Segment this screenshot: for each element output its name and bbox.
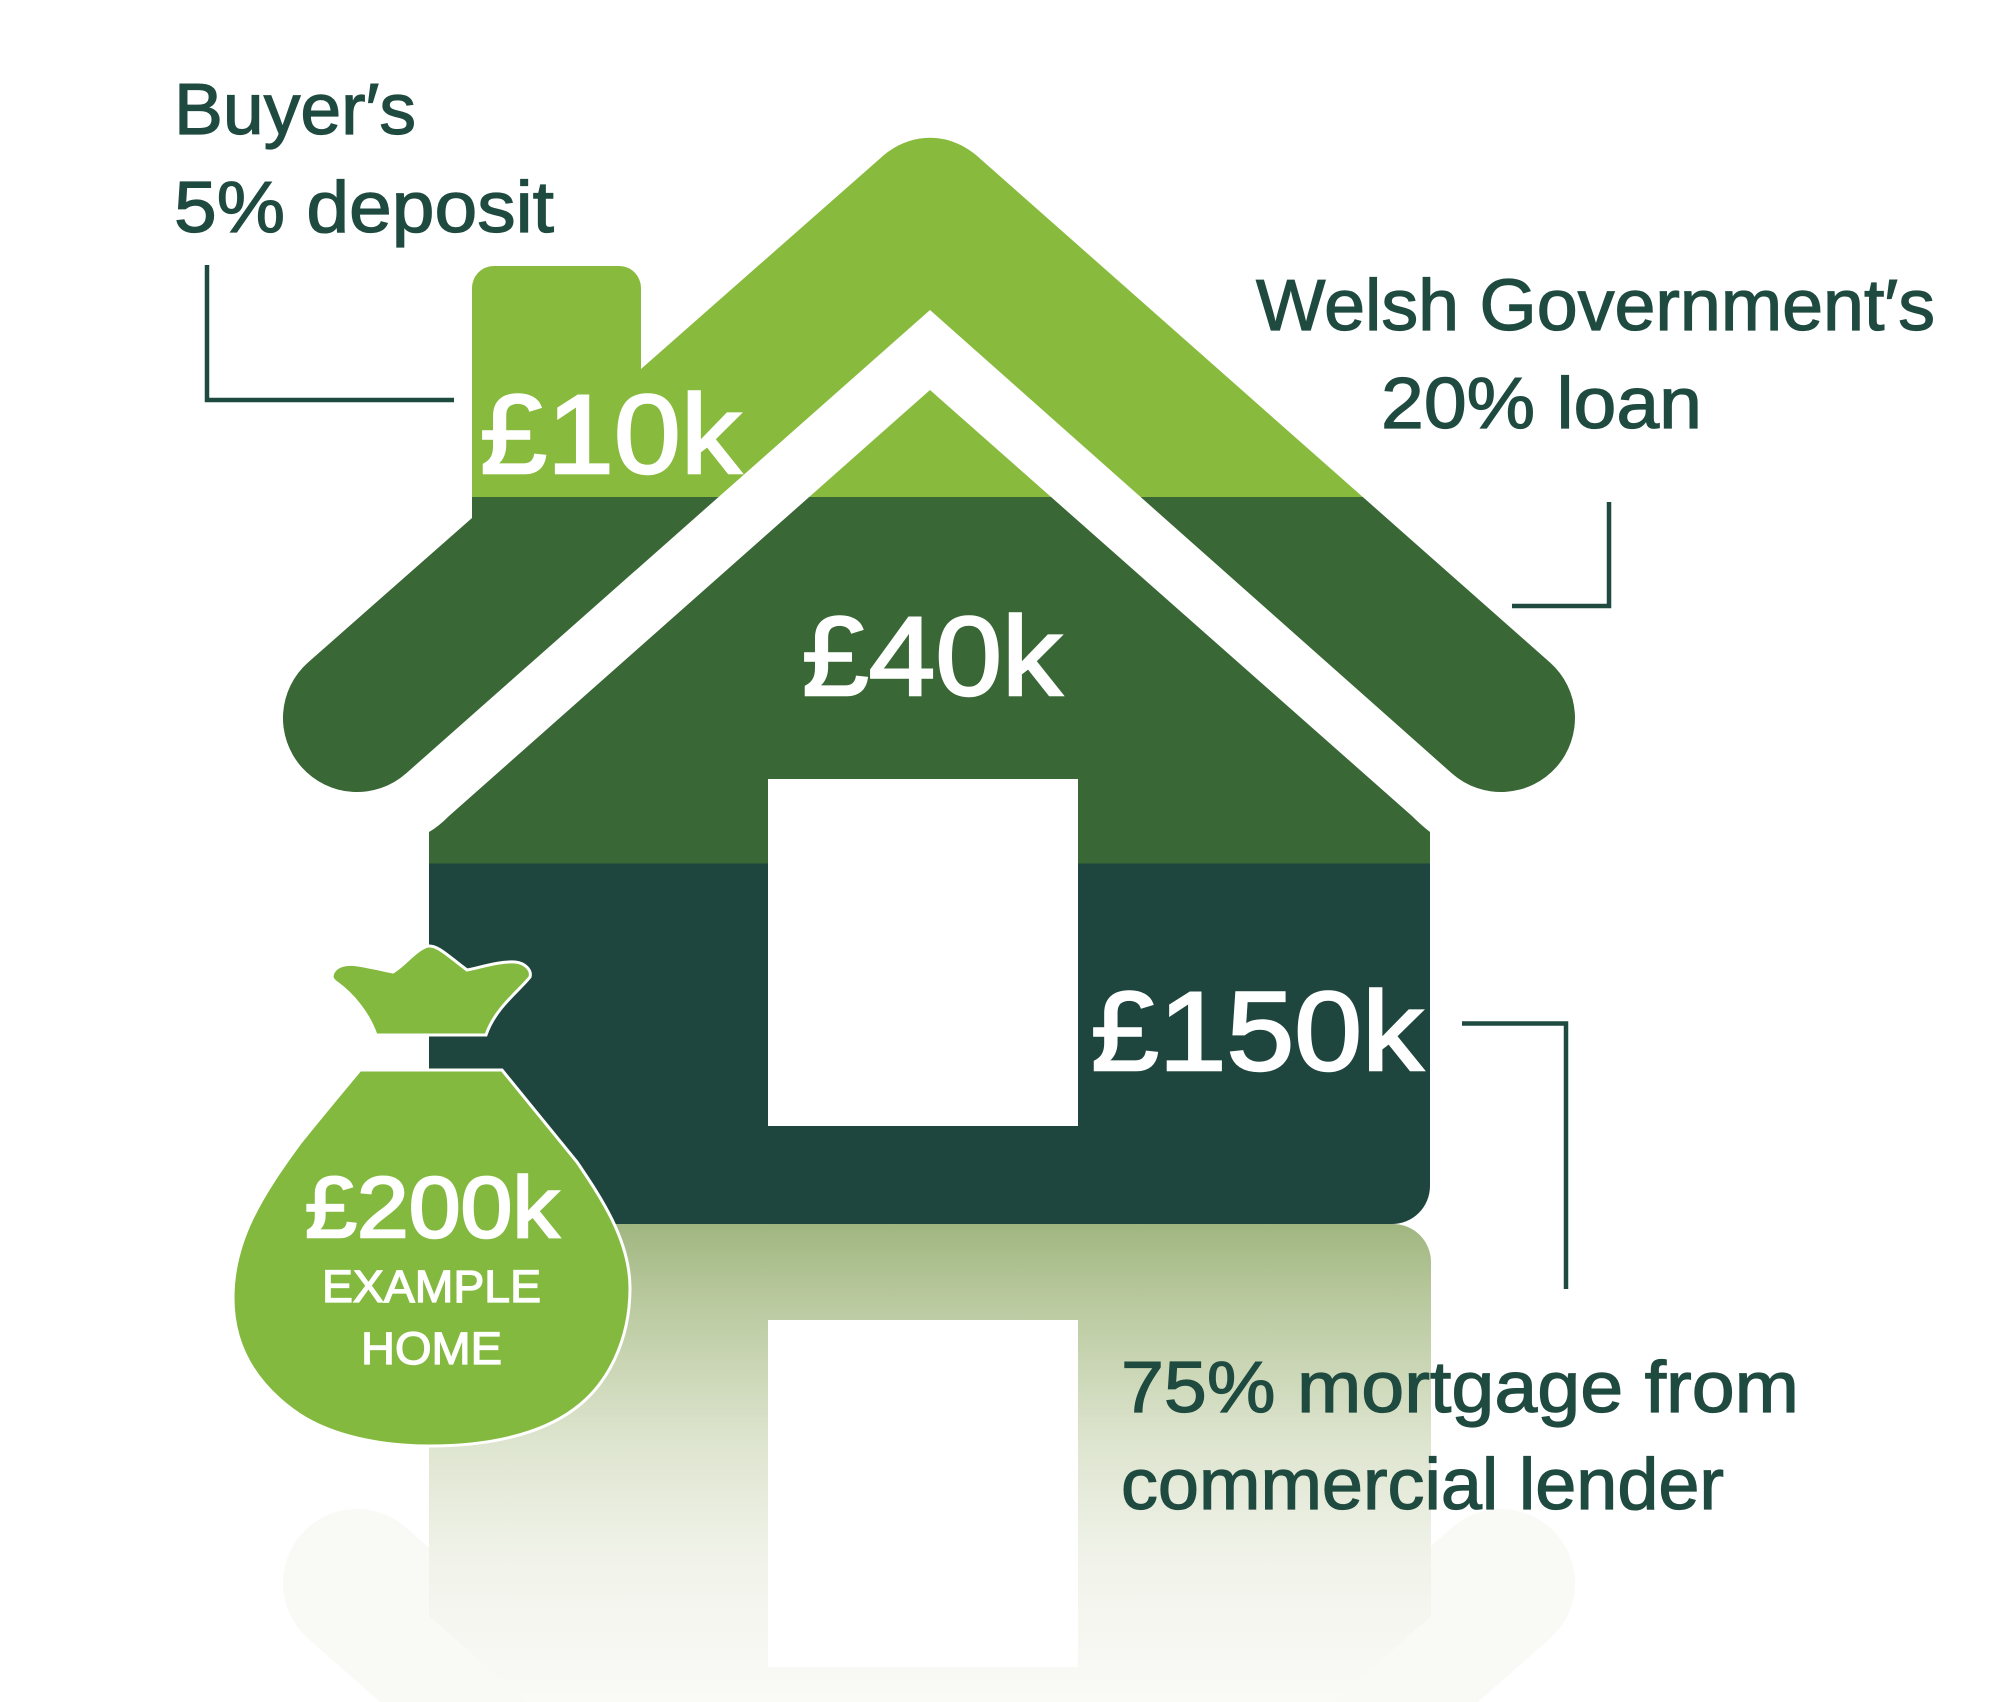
chimney and roof [283,138,1575,792]
bag caption: HOME [361,1323,502,1374]
amount: £10k: £10k [480,372,742,497]
amount: £150k: £150k [1091,969,1424,1094]
label: buyer's deposit [174,70,554,248]
icon: money bag with example home price [233,946,630,1446]
bag price: £200k [305,1160,560,1256]
house body [429,390,1430,1224]
label: buyer's deposit: 5% deposit [174,168,554,248]
label: Welsh Government loan: 20% loan [1381,364,1702,444]
label: Welsh Government loan [1256,266,1935,444]
bag caption [322,1261,541,1374]
label: mortgage: commercial lender [1121,1445,1724,1525]
house icon [283,138,1575,1224]
bag caption: EXAMPLE [322,1261,541,1312]
leader line: deposit [207,265,454,400]
label: buyer's deposit: Buyer′s [174,70,416,150]
label: Welsh Government loan: Welsh Government′s [1256,266,1935,346]
leader line: mortgage [1462,1024,1566,1289]
door [768,779,1078,1126]
bag knot [332,946,530,1035]
leader line: loan [1512,502,1609,606]
label: mortgage: 75% mortgage from [1121,1348,1799,1428]
label: mortgage [1121,1348,1799,1525]
house reflection [283,1224,1575,1702]
bag body [233,1070,630,1446]
amount: £40k: £40k [802,594,1063,719]
